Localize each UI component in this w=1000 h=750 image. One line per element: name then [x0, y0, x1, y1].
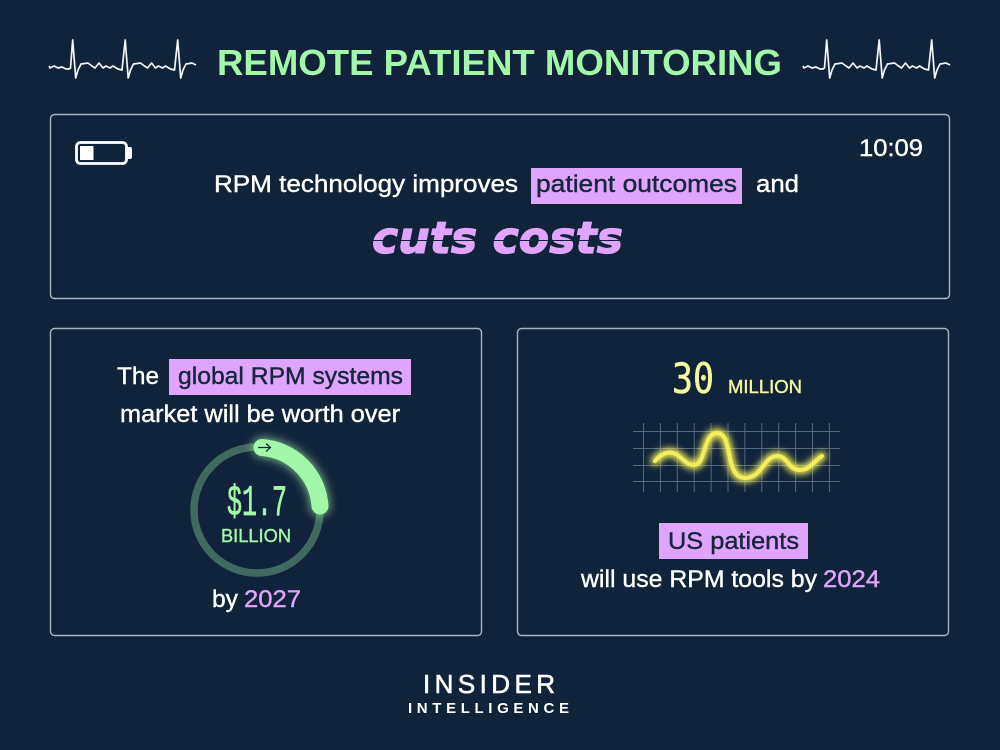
logo: Insider Intelligence: INTELLIGENCE — [408, 700, 569, 717]
by 2027 — [212, 586, 301, 613]
stat: 30 million: 30 — [672, 354, 714, 403]
gauge unit: BILLION — [221, 526, 291, 546]
chart: glowing wave on grid — [633, 423, 840, 492]
icon: arrow — [258, 444, 270, 452]
patients text: US patients — [668, 528, 799, 555]
panel: global market — [50, 328, 482, 636]
stat: 30 million — [672, 354, 802, 403]
clock time: 10:09 — [859, 135, 923, 162]
logo: Insider Intelligence — [408, 669, 569, 717]
logo: Insider Intelligence: INSIDER — [423, 669, 555, 699]
panel: cuts costs — [50, 114, 950, 298]
patients text: will use RPM tools by — [580, 566, 817, 593]
market text: market will be worth over — [120, 401, 400, 428]
title: REMOTE PATIENT MONITORING — [217, 42, 782, 83]
patients text: 2024 — [823, 566, 880, 593]
statement line — [214, 168, 799, 204]
by 2027: by — [212, 586, 238, 613]
gauge value: $1.7 — [227, 479, 287, 529]
statement line: and — [756, 171, 799, 198]
patients text — [580, 523, 880, 593]
statement line: RPM technology improves — [214, 171, 518, 198]
icon: right heartbeat line — [803, 40, 950, 78]
market text: global RPM systems — [178, 363, 403, 390]
market text: The — [117, 363, 159, 390]
by 2027: 2027 — [244, 586, 301, 613]
headline: cuts costs: cuts costs — [372, 213, 623, 264]
icon: left heartbeat line — [49, 40, 196, 78]
stat: 30 million: MILLION — [728, 377, 802, 397]
statement line: patient outcomes — [536, 171, 737, 198]
market text — [117, 359, 411, 428]
panel: US patients — [518, 328, 948, 636]
gauge: 1.7 billion — [194, 444, 320, 573]
icon: battery — [76, 142, 132, 164]
